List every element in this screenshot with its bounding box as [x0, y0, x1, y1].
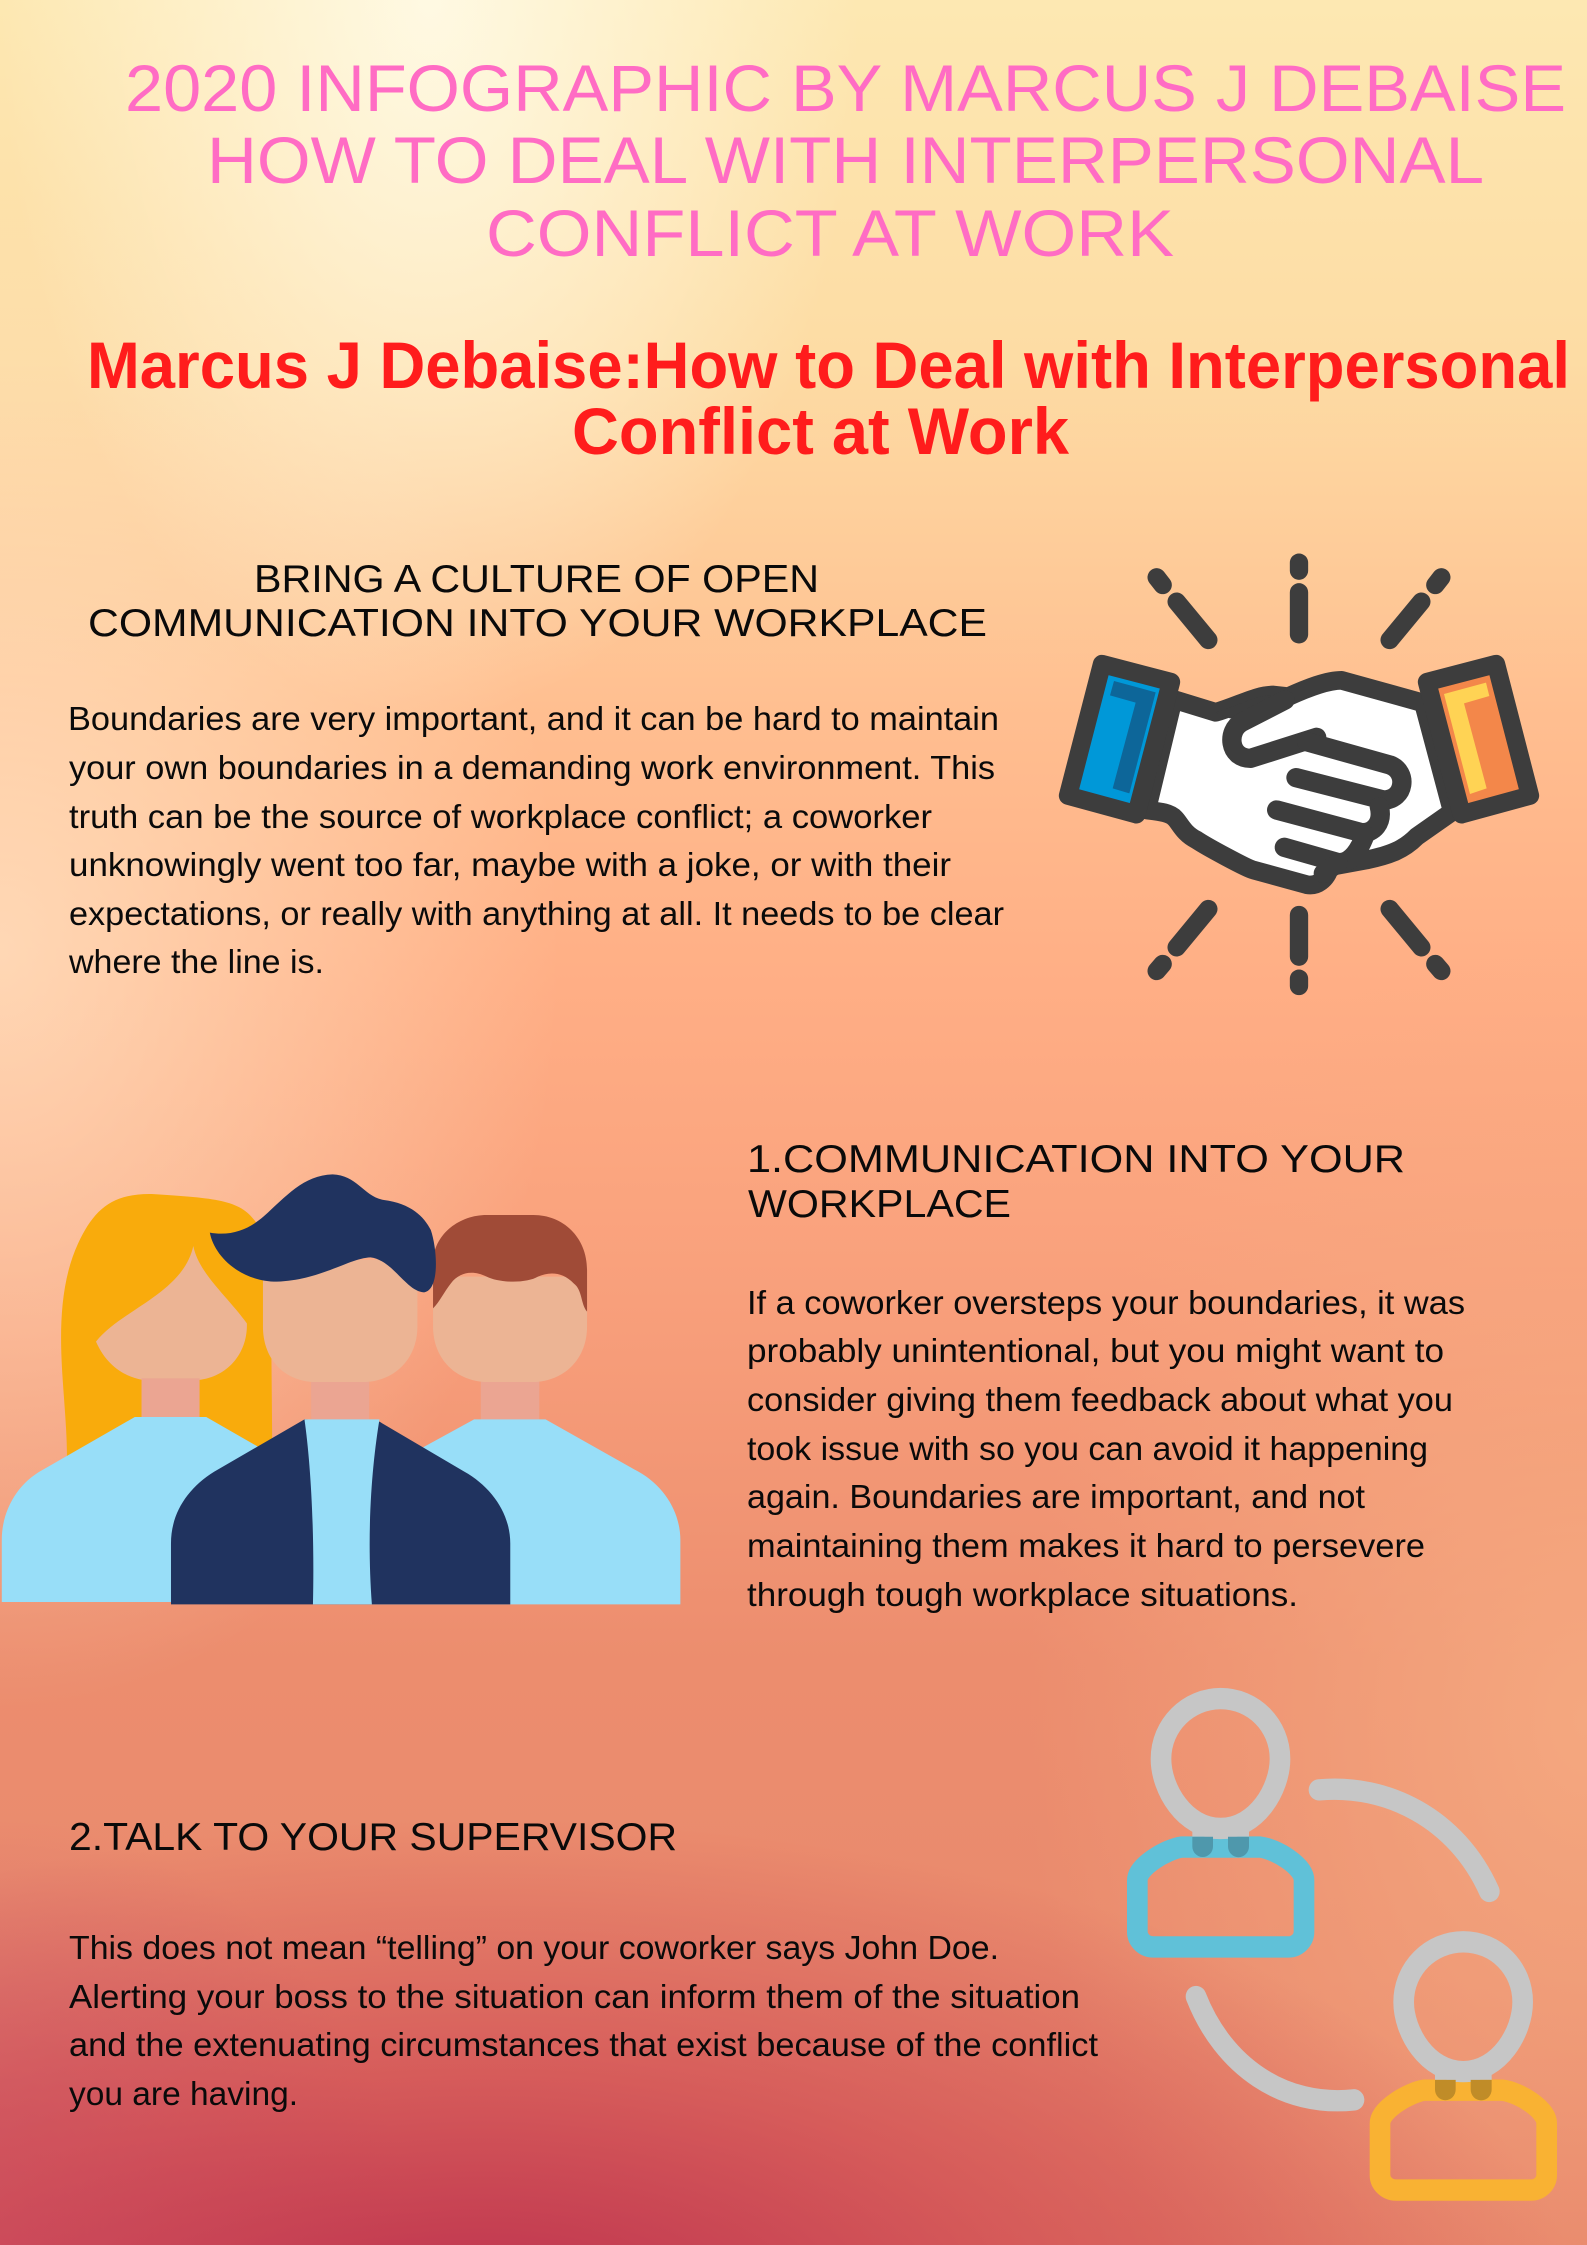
text block: section 2 — [69, 1929, 1098, 2112]
text block: section 2: This does not mean “telling” on your coworker says John Doe. — [69, 1929, 999, 1966]
text block: section 1: took issue with so you can avoid it happening — [747, 1430, 1428, 1467]
text block: boundaries — [68, 700, 1004, 980]
text block: section 1: probably unintentional, but you might want to — [747, 1332, 1444, 1369]
title: HOW TO DEAL WITH INTERPERSONAL — [207, 123, 1484, 197]
heading: section 1: WORKPLACE — [748, 1183, 1011, 1226]
man centre — [171, 1174, 510, 1604]
icon: two people exchange — [1137, 1699, 1547, 2190]
text block: section 1: maintaining them makes it hard to persevere — [747, 1527, 1425, 1564]
text block: section 2: you are having. — [69, 2075, 298, 2112]
text block: section 1: consider giving them feedback about what you — [747, 1381, 1453, 1418]
heading: section 2: 2.TALK TO YOUR SUPERVISOR — [69, 1816, 677, 1859]
man right — [339, 1215, 680, 1604]
person: yellow — [1380, 1942, 1547, 2190]
text block: section 2: Alerting your boss to the situation can inform them of the situation — [69, 1978, 1080, 2015]
arrow: arcs — [1196, 1789, 1489, 2101]
icon: handshake — [1068, 563, 1530, 986]
icon: three people — [2, 1174, 680, 1604]
heading: open communication: COMMUNICATION INTO YOUR WORKPLACE — [88, 602, 987, 645]
subtitle — [87, 328, 1570, 468]
title: 2020 INFOGRAPHIC BY MARCUS J DEBAISE — [125, 51, 1566, 125]
text block: section 1 — [747, 1284, 1465, 1613]
text block: section 1: If a coworker oversteps your boundaries, it was — [747, 1284, 1465, 1321]
text block: boundaries: unknowingly went too far, maybe with a joke, or with their — [69, 846, 951, 883]
text block: boundaries: your own boundaries in a demanding work environment. This — [69, 749, 995, 786]
subtitle: Conflict at Work — [572, 394, 1069, 468]
text block: section 1: through tough workplace situations. — [747, 1576, 1298, 1613]
title: CONFLICT AT WORK — [486, 196, 1174, 270]
title — [125, 51, 1566, 270]
heading: section 1 — [747, 1138, 1405, 1226]
woman — [2, 1194, 339, 1602]
text block: boundaries: Boundaries are very important, and it can be hard to maintain — [68, 700, 999, 737]
text block: section 2: and the extenuating circumstances that exist because of the conflict — [69, 2026, 1098, 2063]
text block: boundaries: expectations, or really with anything at all. It needs to be clear — [69, 895, 1004, 932]
heading: open communication — [88, 558, 987, 645]
heading: section 1: 1.COMMUNICATION INTO YOUR — [747, 1138, 1405, 1181]
text block: boundaries: truth can be the source of workplace conflict; a coworker — [69, 798, 932, 835]
text block: section 1: again. Boundaries are important, and not — [747, 1478, 1365, 1515]
text block: boundaries: where the line is. — [68, 943, 324, 980]
subtitle: Marcus J Debaise:How to Deal with Interpersonal — [87, 328, 1570, 402]
person: blue — [1137, 1699, 1304, 1947]
heading: open communication: BRING A CULTURE OF OPEN — [254, 558, 819, 601]
